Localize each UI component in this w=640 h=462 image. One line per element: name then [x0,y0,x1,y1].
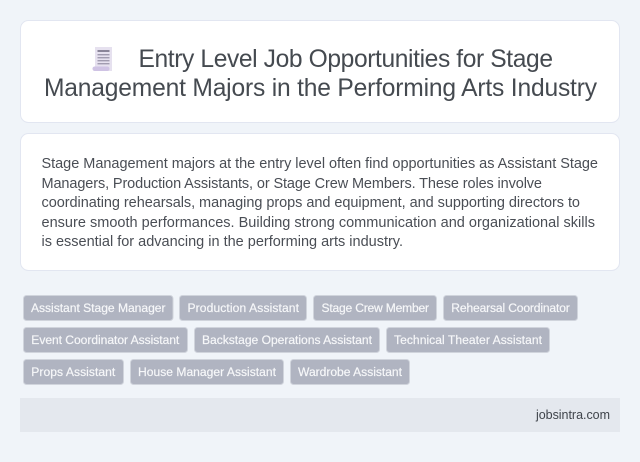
title [44,46,598,102]
panel: description card [20,134,620,270]
footer source text: jobsintra.com [535,408,610,422]
tag: House Manager Assistant [130,360,284,384]
tag: House Manager Assistant: House Manager Assistant [138,365,277,379]
footer bar [20,398,620,432]
job role tags [24,296,578,384]
tag: Assistant Stage Manager: Assistant Stage Manager [31,301,166,315]
icon: scroll document [92,47,112,71]
tag: Event Coordinator Assistant: Event Coordinator Assistant [31,333,180,347]
tag: Backstage Operations Assistant [194,328,380,352]
panel: title card [20,20,620,122]
title: Entry Level Job Opportunities for Stage [138,46,553,73]
tag: Wardrobe Assistant [290,360,410,384]
description text: is essential for advancing in the performing arts industry. [42,234,403,250]
tag: Props Assistant [24,360,124,384]
tag: Event Coordinator Assistant [24,328,188,352]
tag: Technical Theater Assistant: Technical Theater Assistant [394,333,543,347]
tag: Technical Theater Assistant [386,328,550,352]
tag: Props Assistant: Props Assistant [31,365,116,379]
tag: Rehearsal Coordinator: Rehearsal Coordinator [451,301,570,315]
description text: coordinating rehearsals, managing props and equipment, and supporting directors to [42,195,580,211]
tag: Assistant Stage Manager [24,296,173,320]
description text: ensure smooth performances. Building strong communication and organizational skills [42,215,595,231]
tag: Backstage Operations Assistant: Backstage Operations Assistant [202,333,373,347]
title: Management Majors in the Performing Arts Industry [44,75,598,102]
description text: Stage Management majors at the entry level often find opportunities as Assistant Stage [42,156,598,172]
tag: Production Assistant: Production Assistant [188,301,300,315]
tag: Rehearsal Coordinator [444,296,578,320]
tag: Wardrobe Assistant: Wardrobe Assistant [298,365,403,379]
tag: Stage Crew Member: Stage Crew Member [322,301,429,315]
description text: Managers, Production Assistants, or Stage Crew Members. These roles involve [42,176,542,192]
description text [42,156,598,250]
tag: Stage Crew Member [314,296,436,320]
tag: Production Assistant [180,296,306,320]
